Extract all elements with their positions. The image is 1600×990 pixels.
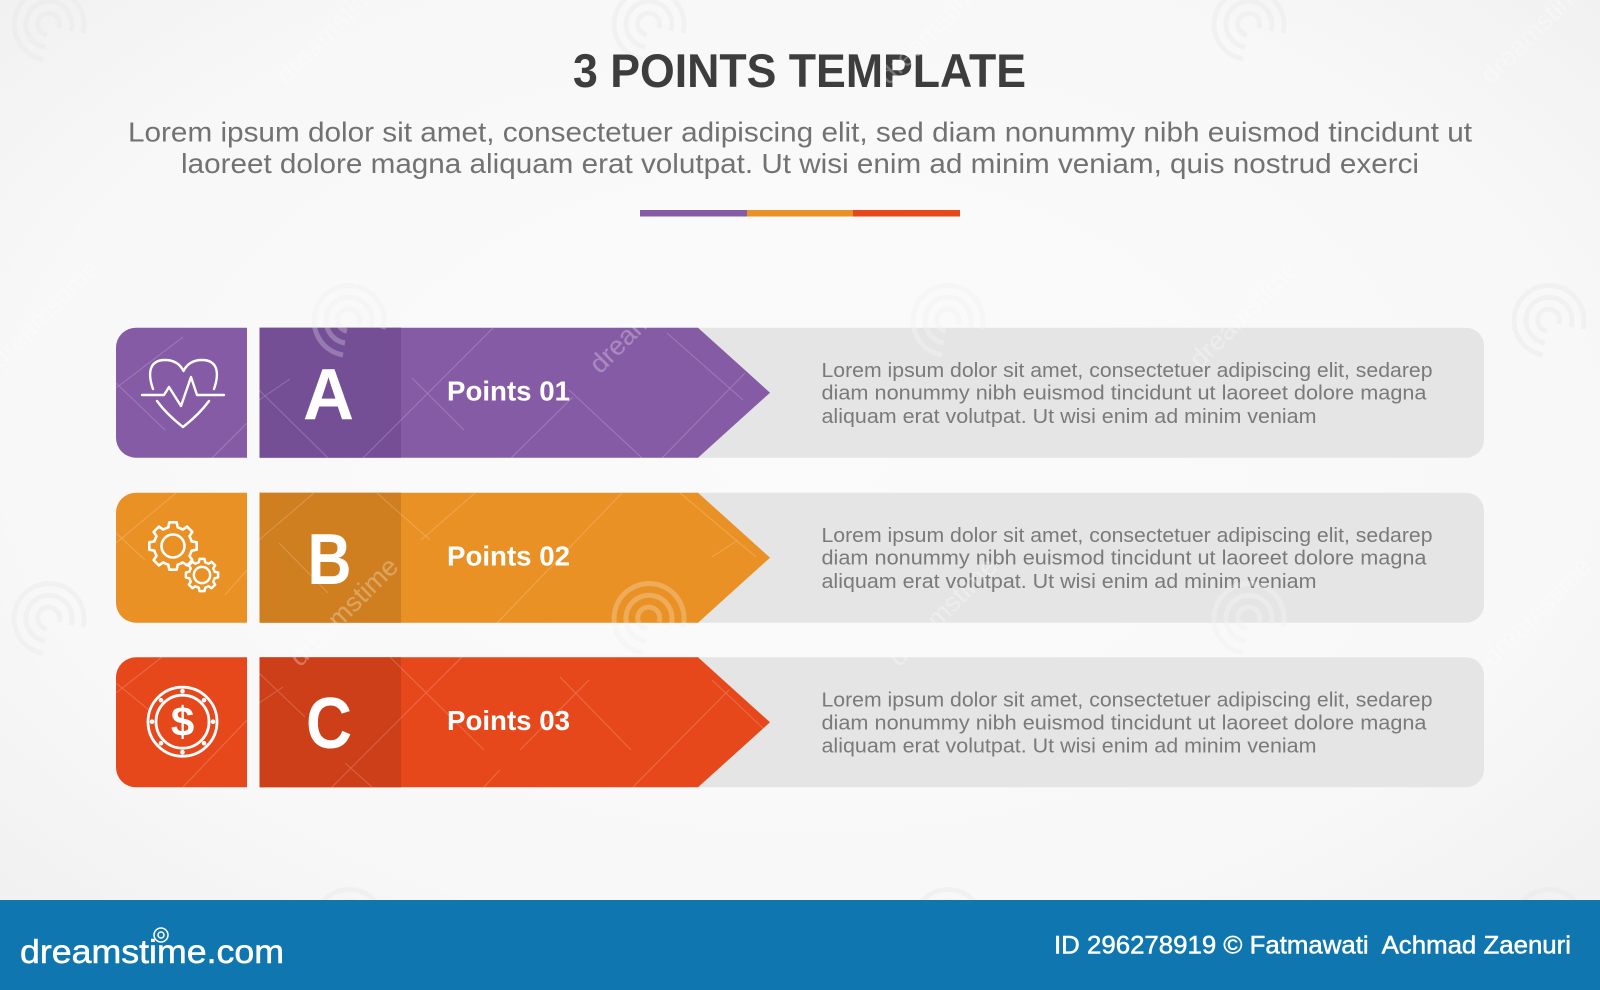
watermark text: dreamstime [1476,551,1597,672]
watermark text: dreamstime [882,551,1003,672]
watermark text: dreamstime [1183,253,1304,374]
description text C [822,690,1432,758]
image credit: ID 296278919 © Fatmawati Achmad Zaenuri [1054,932,1571,960]
letter tab B [260,493,401,623]
description text A [822,360,1432,428]
footer bar [0,900,1600,990]
large gear [149,522,197,570]
icon: dollar coin [148,687,217,756]
description text A: aliquam erat volutpat. Ut wisi enim ad minim veniam [822,406,1316,428]
subtitle text [128,116,1472,179]
label: Points 02: Points 02 [447,540,570,572]
icon tile B [116,493,247,623]
label: Points 03: Points 03 [447,705,570,736]
icon tile A [116,328,247,458]
description text C: aliquam erat volutpat. Ut wisi enim ad minim veniam [822,736,1316,758]
row C [116,657,1484,787]
description text B: aliquam erat volutpat. Ut wisi enim ad minim veniam [822,571,1316,593]
letter tab A [260,328,401,458]
row B [116,493,1484,623]
small gear [186,559,218,591]
panel: description C [600,657,1484,787]
watermark text [0,0,1597,672]
icon: dollar coin: $ [171,698,194,745]
icon: heart with pulse [142,360,224,427]
arrow C [260,657,770,787]
letter B: B [308,520,352,600]
watermark lines [116,328,765,787]
subtitle text: Lorem ipsum dolor sit amet, consectetuer adipiscing elit, sed diam nonummy nibh euismod tincidunt ut [128,116,1472,148]
subtitle text: laoreet dolore magna aliquam erat volutpat. Ut wisi enim ad minim veniam, quis nostrud exerci [181,148,1419,179]
arrow B [260,493,770,623]
logo: dreamstime.com: dreamstime.com [20,933,284,970]
description text B: Lorem ipsum dolor sit amet, consectetuer adipiscing elit, sedarep [822,525,1432,547]
watermark text: dreamstime [583,258,704,379]
icon tile C [116,657,247,787]
letter C: C [306,684,352,764]
panel: description A [600,328,1484,458]
arrow A [260,328,770,458]
description text C: Lorem ipsum dolor sit amet, consectetuer adipiscing elit, sedarep [822,690,1432,712]
letter tab C [260,657,401,787]
description text A: Lorem ipsum dolor sit amet, consectetuer adipiscing elit, sedarep [822,360,1432,382]
letter A: A [303,355,354,435]
description text B: diam nonummy nibh euismod tincidunt ut laoreet dolore magna [822,548,1427,570]
tri-colour divider [640,210,960,216]
icon: gears [149,522,218,591]
row A [116,328,1484,458]
description text C: diam nonummy nibh euismod tincidunt ut laoreet dolore magna [822,712,1427,734]
description text A: diam nonummy nibh euismod tincidunt ut laoreet dolore magna [822,383,1427,405]
title: 3 POINTS TEMPLATE [573,44,1026,97]
watermark text: dreamstime [283,551,404,672]
label: Points 01: Points 01 [447,376,570,406]
description text B [822,525,1432,593]
panel: description B [600,493,1484,623]
watermark spirals over content [314,286,1284,653]
